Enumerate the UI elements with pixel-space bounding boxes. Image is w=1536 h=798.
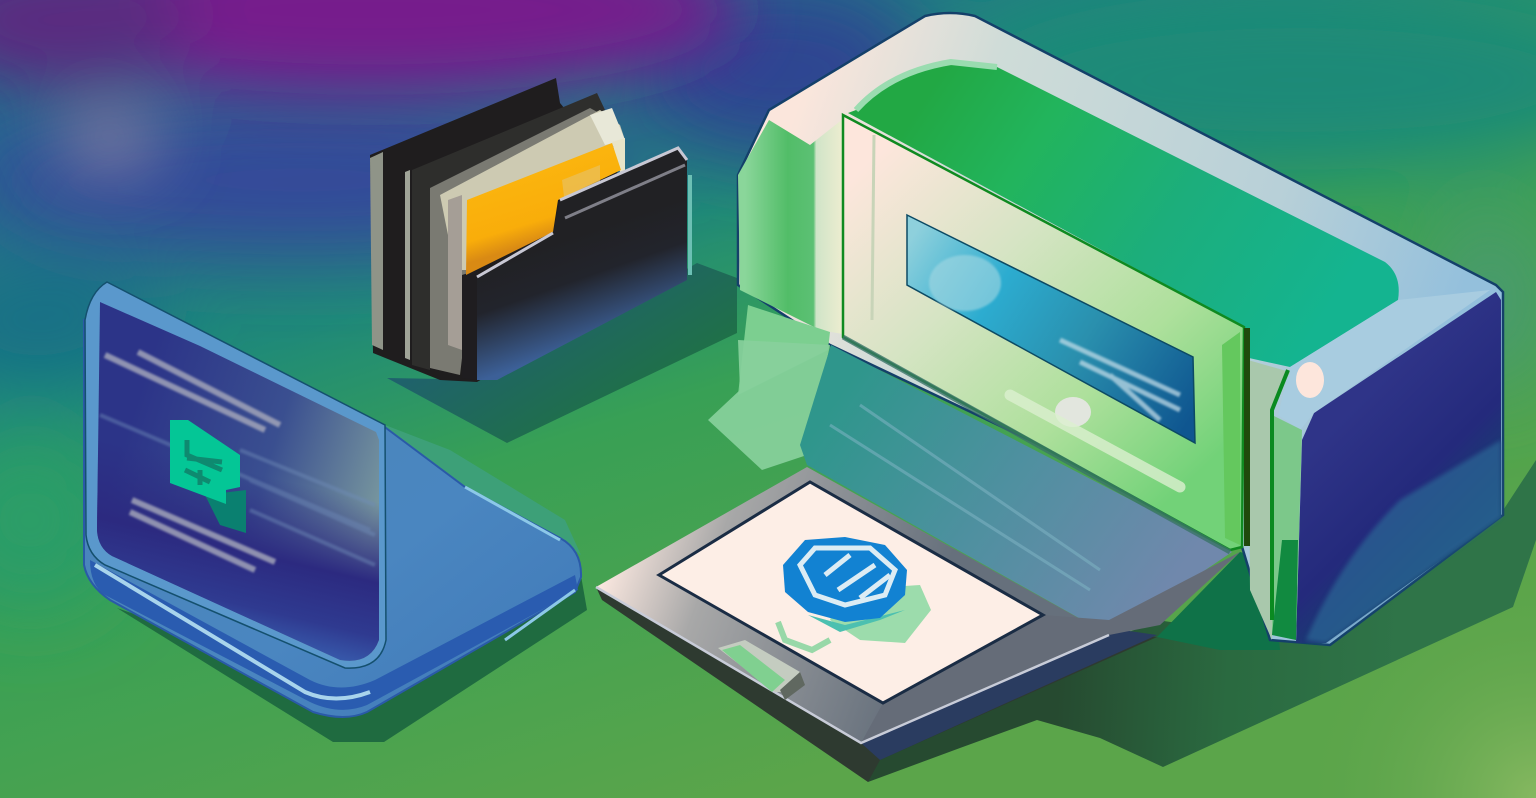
printer side strip [1248, 360, 1290, 640]
icon: green chat badge [170, 420, 246, 533]
tray handle [718, 640, 800, 692]
tablet base [84, 320, 581, 717]
output tray [596, 467, 1240, 782]
printer top green recess [848, 62, 1399, 367]
display [907, 215, 1195, 443]
printer [596, 13, 1536, 782]
dark green under-bridge wedge [1157, 552, 1280, 650]
holder shadow [387, 263, 737, 443]
display icon [929, 255, 1001, 311]
holder back stripes [370, 78, 640, 382]
printer side rim [1278, 290, 1490, 430]
folder holder [370, 78, 737, 443]
translucent sheet [708, 340, 830, 470]
printer right side [1296, 292, 1501, 643]
tablet text lines [105, 352, 280, 570]
printer left glass body [738, 115, 848, 335]
printer front panel [843, 115, 1244, 550]
tablet device [84, 282, 587, 742]
tablet screen [85, 282, 386, 668]
teal bridge [800, 345, 1232, 635]
green clip [778, 622, 830, 650]
printer shell [738, 13, 1503, 645]
printer shadow [868, 460, 1536, 782]
paper sheet [659, 482, 1043, 703]
icon: blue badge [718, 537, 931, 700]
tablet green glass rim [385, 425, 581, 555]
panel buttons [1010, 395, 1180, 487]
tablet base front lip [90, 560, 578, 710]
tablet shadow [117, 570, 587, 742]
yellow folder [466, 143, 621, 275]
front pocket [477, 148, 687, 380]
